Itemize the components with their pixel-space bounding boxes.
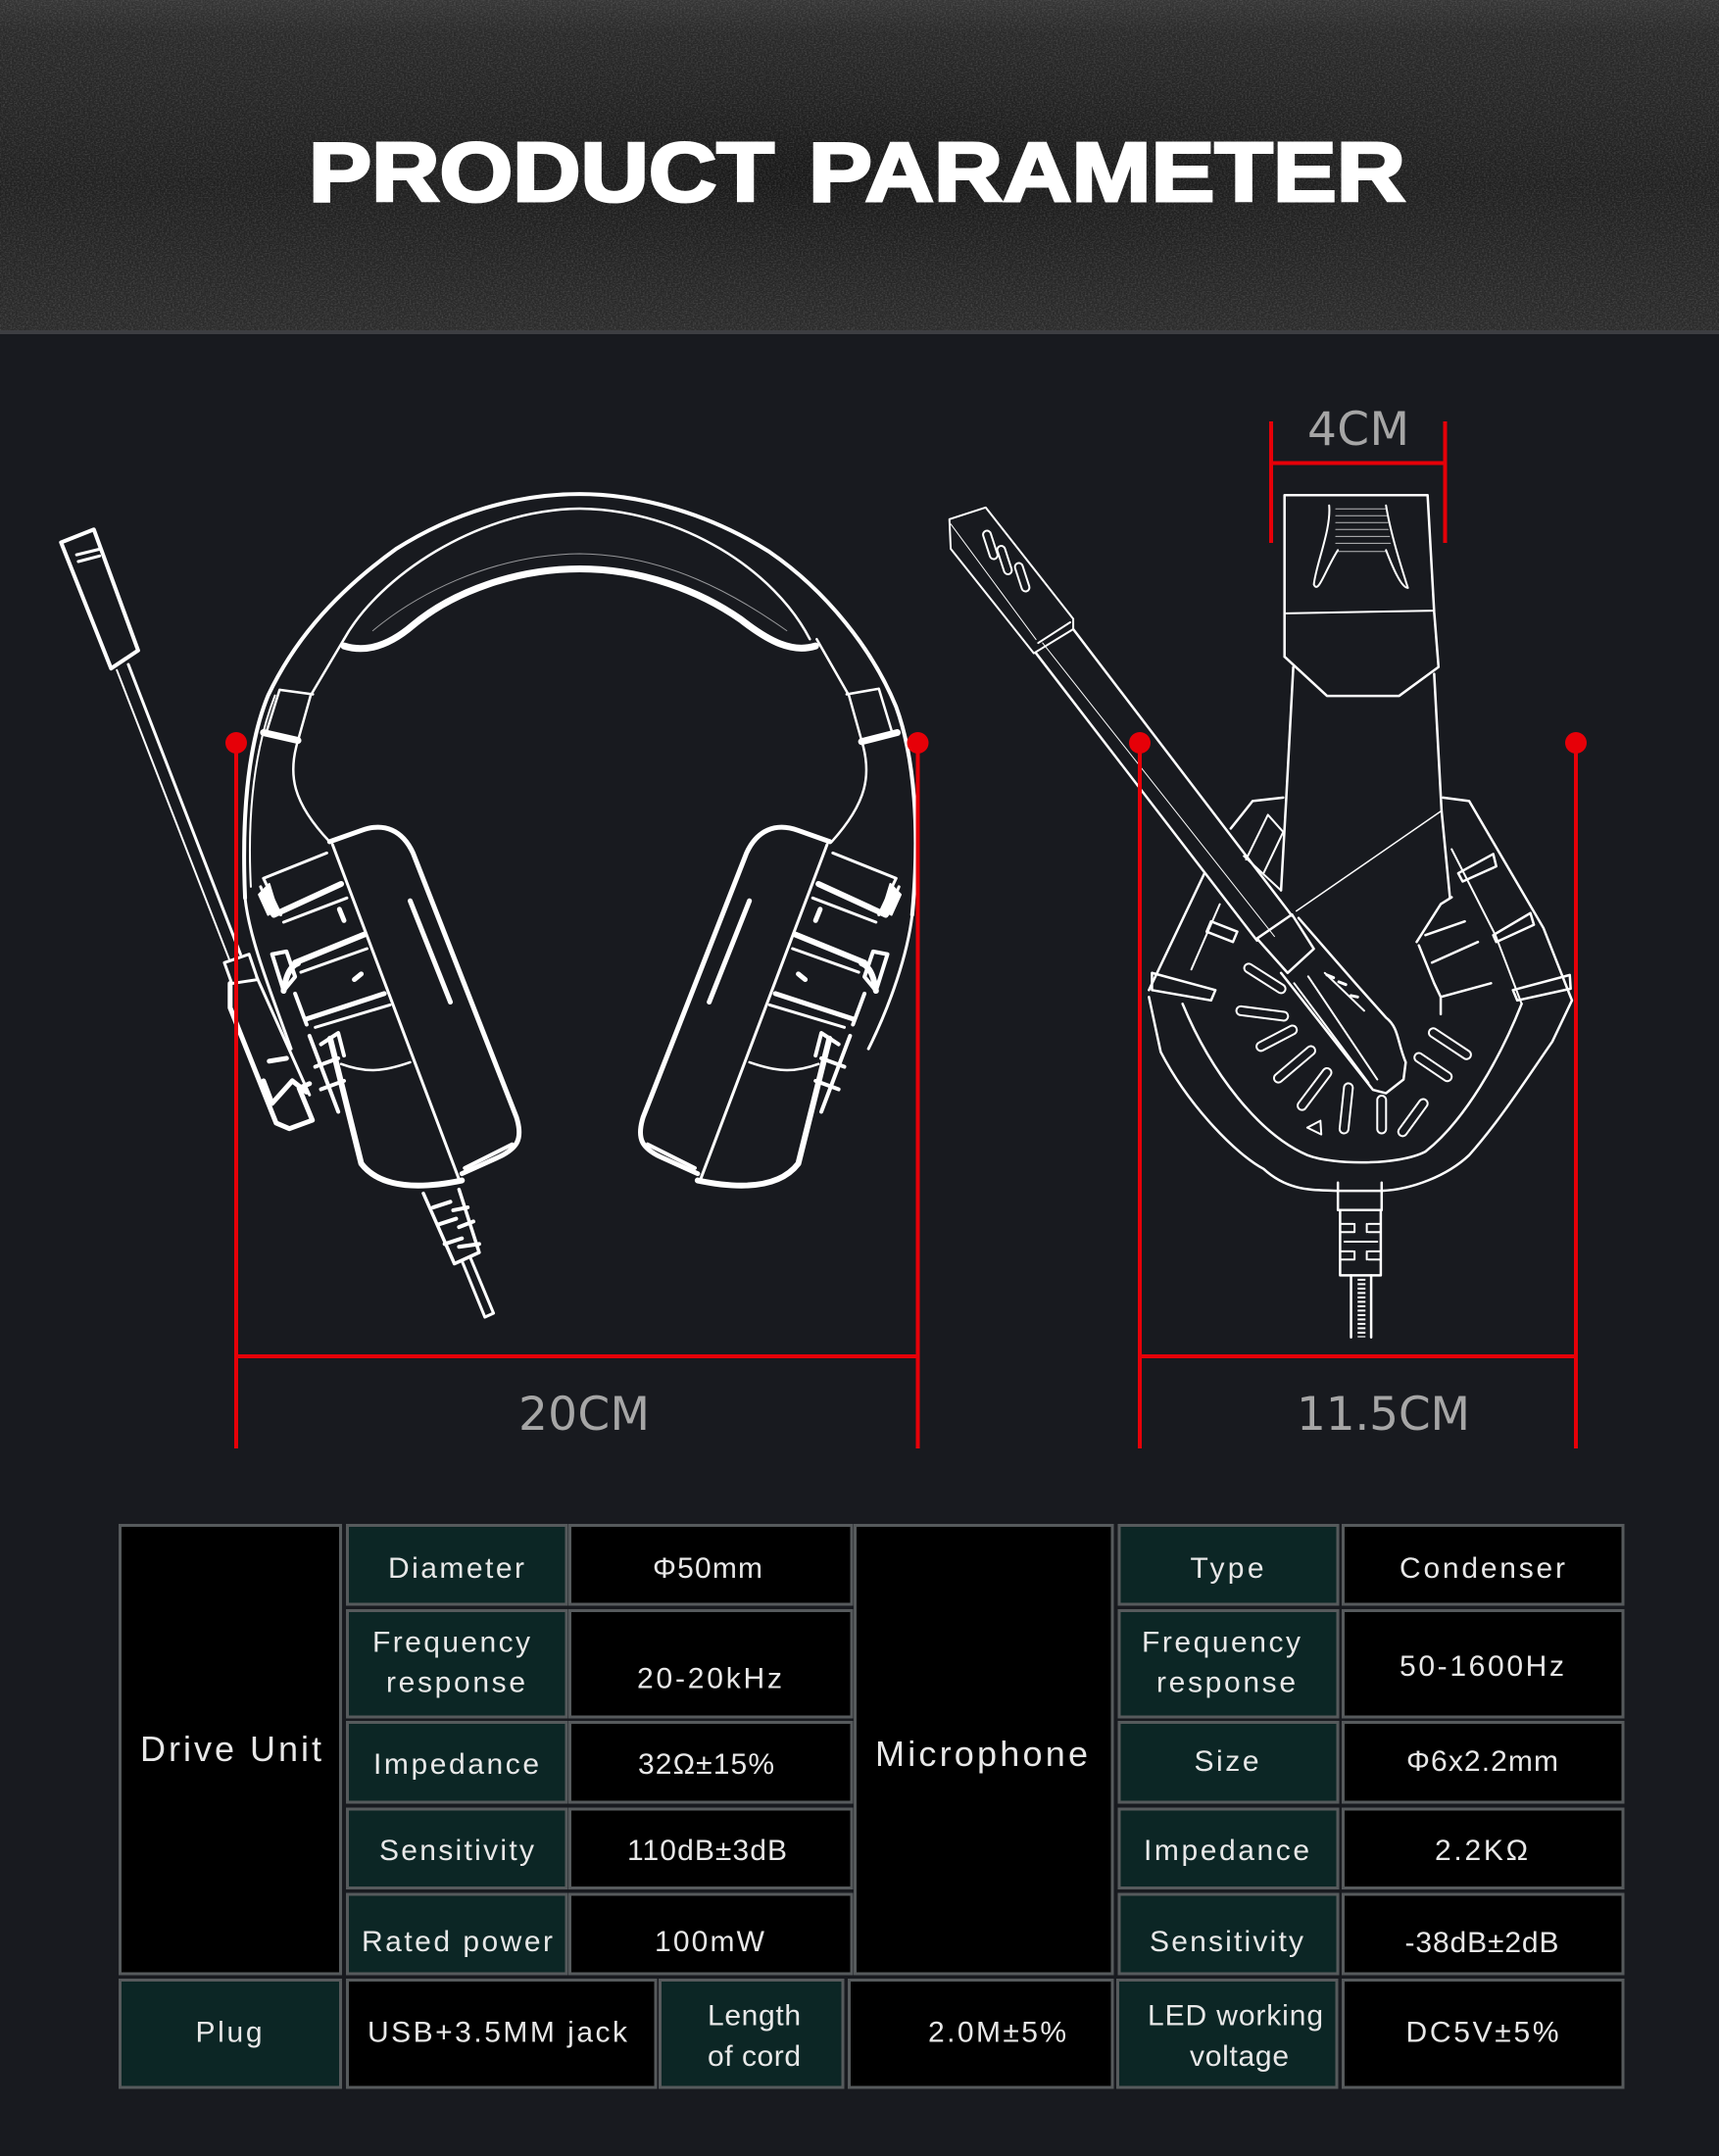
ear cup fins [1241, 968, 1466, 1135]
frequency response row: 20-20kHz [637, 1662, 782, 1695]
plug cell [120, 1980, 341, 2087]
cable side [1338, 1183, 1382, 1338]
microphone impedance row: 2.2KΩ [1435, 1835, 1528, 1867]
header band [0, 0, 1719, 334]
headband [244, 494, 915, 1049]
microphone slots [982, 529, 1030, 593]
plug value cell: USB+3.5MM jack [368, 2017, 628, 2048]
microphone impedance row [1119, 1809, 1623, 1887]
dimension: 4CM band width: 4CM [1307, 403, 1409, 457]
title: PARAMETER [809, 126, 1405, 220]
impedance row: Impedance [373, 1748, 539, 1781]
drive unit group cell [120, 1525, 341, 1974]
side view headset line drawing [950, 495, 1572, 1338]
sensitivity row: Sensitivity [379, 1835, 534, 1867]
right ear cup [640, 827, 901, 1186]
microphone size row: Size [1194, 1745, 1258, 1778]
microphone size row [1119, 1723, 1623, 1802]
microphone impedance row: Impedance [1144, 1835, 1309, 1867]
length of cord cell [661, 1980, 843, 2087]
LED voltage cell [1117, 1980, 1337, 2087]
microphone frequency row: 50-1600Hz [1400, 1650, 1564, 1683]
dimension: 20CM width: 20CM [518, 1388, 650, 1442]
dimension: 11.5CM depth [1129, 732, 1587, 1448]
frequency response row: Frequency [372, 1627, 530, 1658]
cable [423, 1190, 494, 1317]
LED voltage cell: voltage [1190, 2040, 1289, 2073]
left ear cup [259, 827, 519, 1186]
microphone head [950, 508, 1073, 654]
microphone size row: Φ6x2.2mm [1406, 1745, 1558, 1778]
impedance row: 32Ω±15% [638, 1748, 774, 1781]
frequency response row [347, 1611, 852, 1717]
microphone boom [1036, 629, 1405, 1094]
microphone group cell: Microphone [875, 1734, 1088, 1774]
rated power row [347, 1894, 852, 1974]
microphone type row: Type [1190, 1552, 1264, 1585]
rated power row: 100mW [655, 1926, 765, 1958]
impedance row [347, 1723, 852, 1802]
dimension: 20CM width [225, 732, 929, 1448]
microphone type row: Condenser [1400, 1552, 1565, 1585]
headband side [1281, 495, 1449, 911]
specification table [120, 1525, 1623, 2087]
microphone boom [61, 529, 313, 1129]
dimension: 4CM band width [1271, 403, 1445, 543]
LED voltage value cell [1343, 1980, 1623, 2087]
LED voltage value cell: DC5V±5% [1405, 2017, 1558, 2048]
sensitivity row: 110dB±3dB [627, 1835, 787, 1867]
diameter row: Diameter [388, 1552, 524, 1585]
plug value cell [347, 1980, 656, 2087]
microphone type row [1119, 1525, 1623, 1604]
title: PRODUCT [309, 126, 774, 220]
LED voltage cell: LED working [1148, 1999, 1323, 2033]
front view headset line drawing [61, 494, 915, 1317]
diameter row [347, 1525, 852, 1604]
drive unit group cell: Drive Unit [140, 1729, 321, 1769]
frequency response row: response [386, 1666, 525, 1699]
length value cell: 2.0M±5% [928, 2017, 1066, 2048]
title [309, 126, 1405, 220]
length of cord cell: Length [708, 1999, 801, 2033]
microphone frequency row: response [1156, 1666, 1296, 1699]
rated power row: Rated power [362, 1926, 553, 1958]
dimension: 11.5CM depth: 11.5CM [1297, 1388, 1470, 1442]
length value cell [849, 1980, 1112, 2087]
plug cell: Plug [196, 2017, 263, 2048]
length of cord cell: of cord [708, 2040, 801, 2073]
microphone frequency row [1119, 1611, 1623, 1717]
microphone sensitivity row: -38dB±2dB [1405, 1927, 1558, 1959]
microphone sensitivity row: Sensitivity [1150, 1926, 1303, 1958]
microphone group cell [855, 1525, 1112, 1974]
diameter row: Φ50mm [653, 1552, 762, 1585]
ear cup side [1149, 798, 1572, 1191]
microphone sensitivity row [1119, 1894, 1623, 1974]
microphone frequency row: Frequency [1142, 1627, 1301, 1658]
sensitivity row [347, 1809, 852, 1887]
